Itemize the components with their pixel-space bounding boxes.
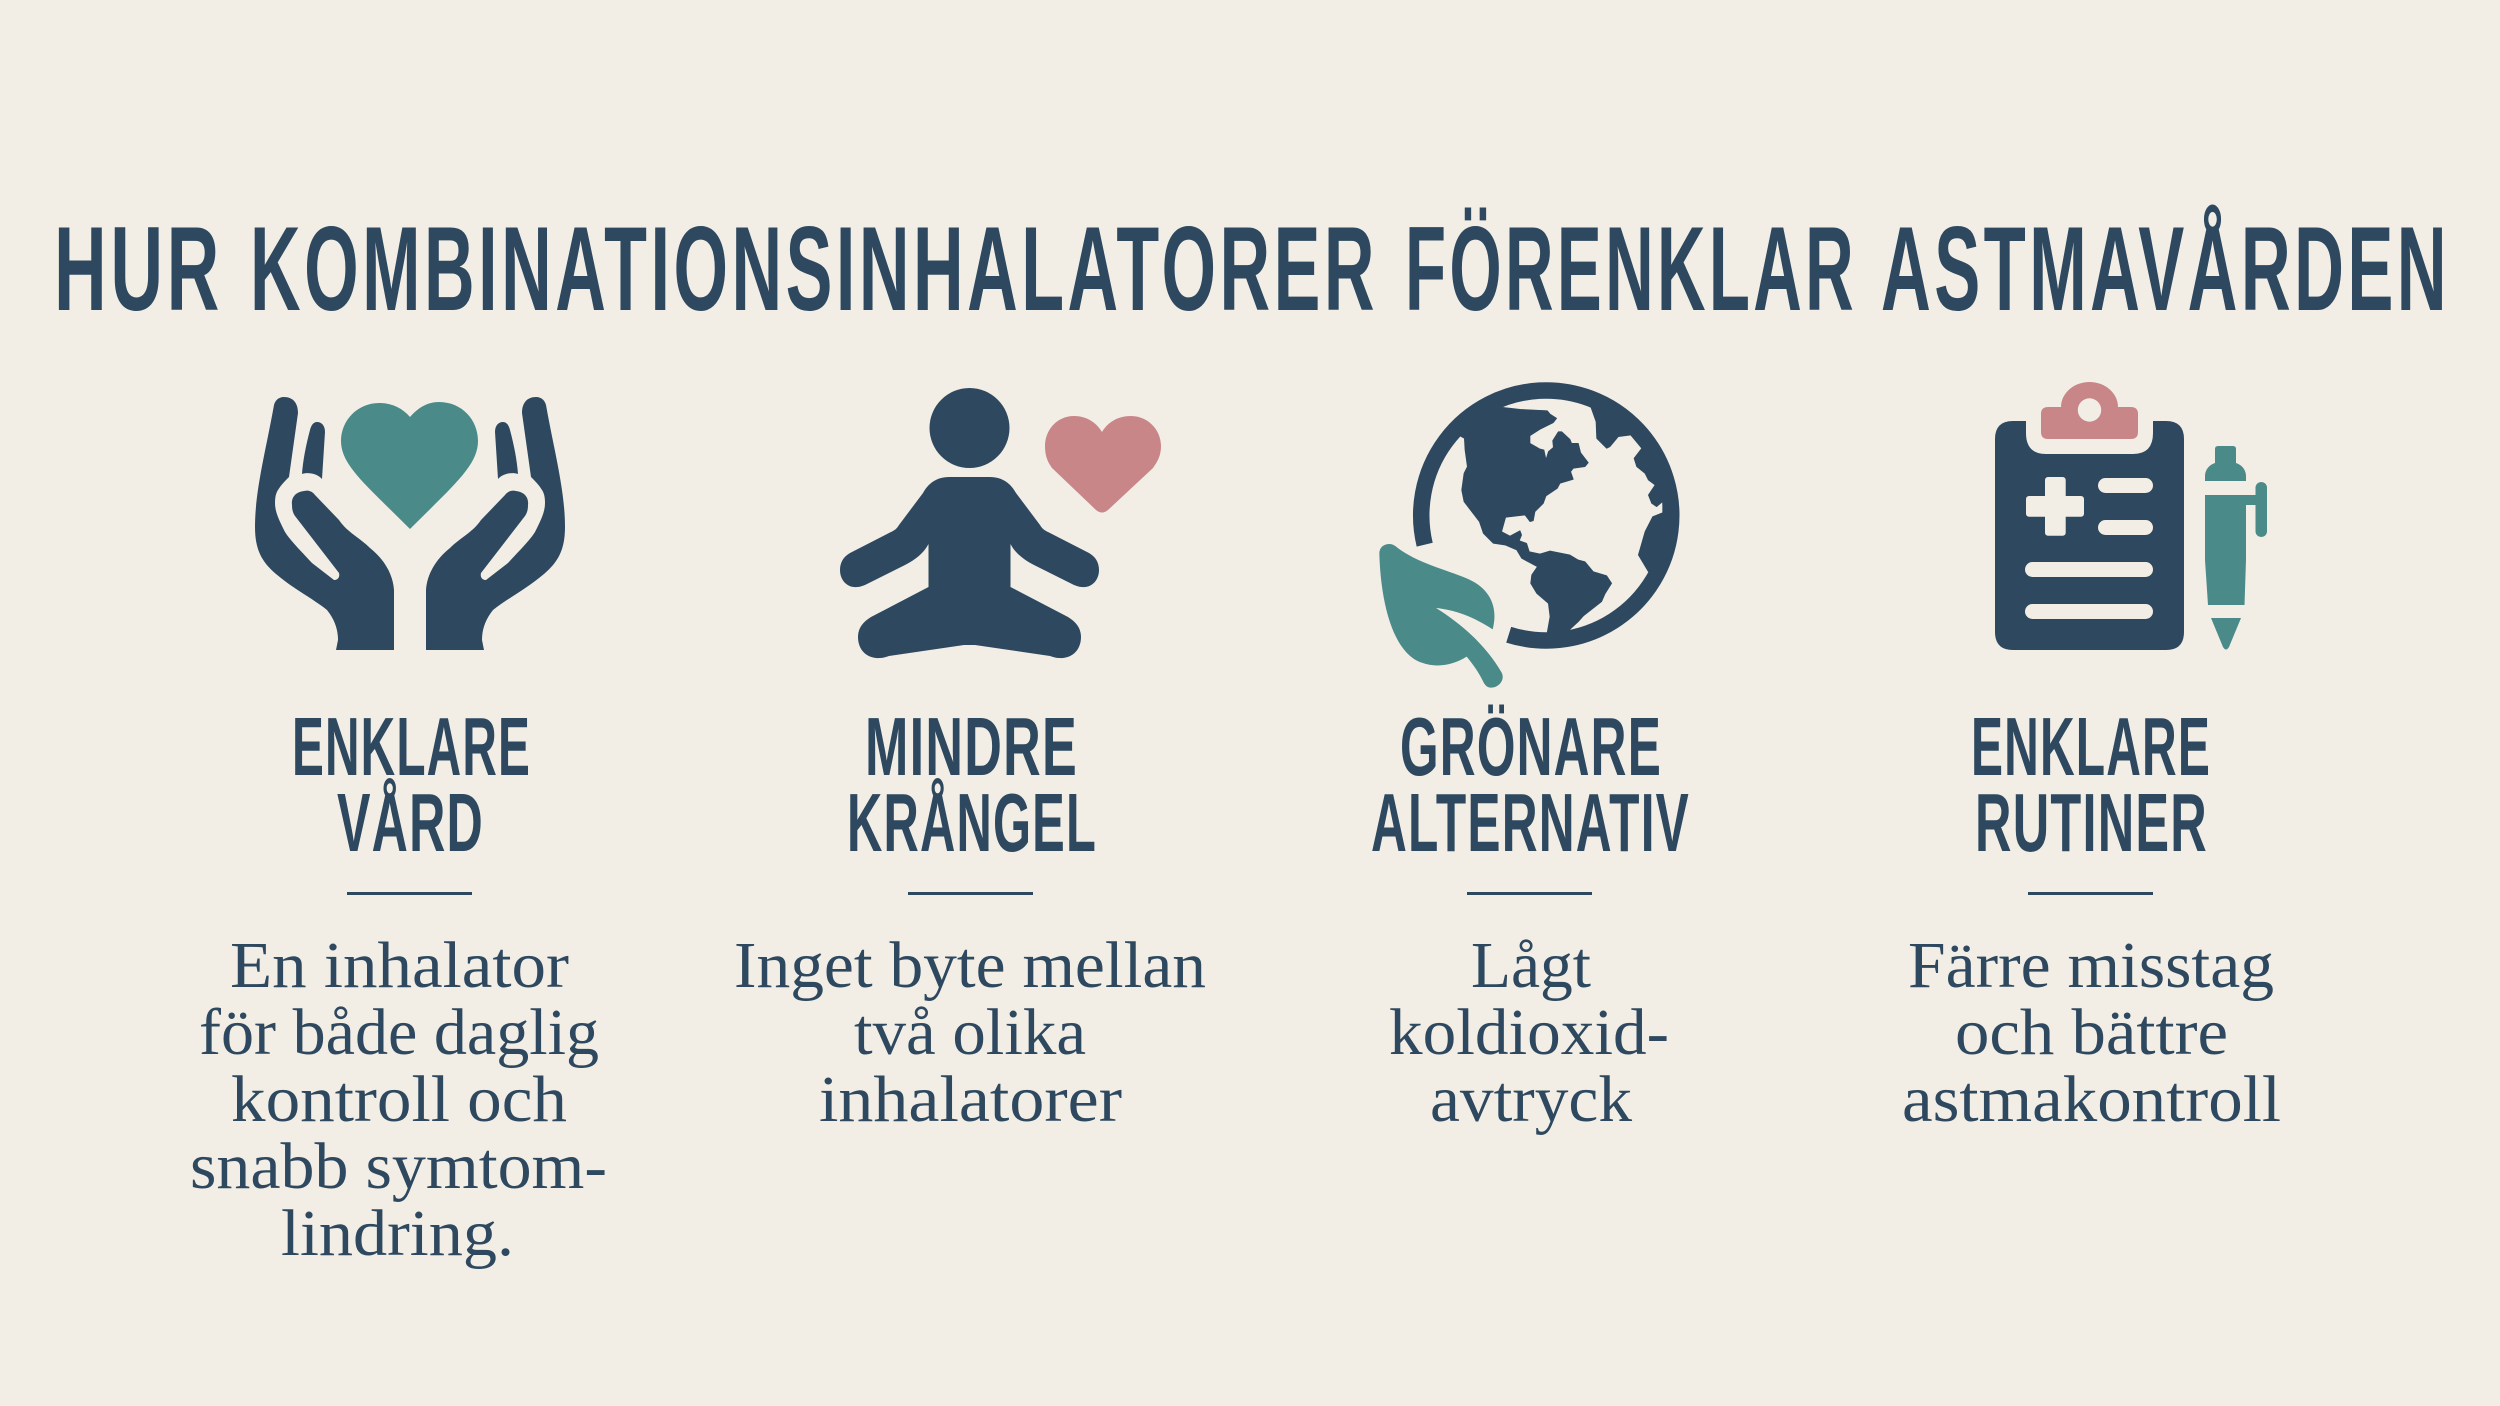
pink heart: [1045, 416, 1161, 512]
description: och bättre: [1955, 996, 2228, 1069]
description: En inhalator: [230, 929, 569, 1002]
description: [1902, 929, 2281, 1136]
description: koldioxid-: [1389, 996, 1669, 1069]
description: Inget byte mellan: [734, 929, 1206, 1002]
panel: enklare vård: [190, 397, 607, 1270]
right hand: [426, 397, 565, 650]
description: två olika: [854, 996, 1086, 1069]
description: lindring.: [281, 1197, 514, 1270]
title: FÖRENKLAR: [1405, 202, 1857, 336]
heading: KRÅNGEL: [847, 776, 1097, 869]
head: [930, 388, 1010, 468]
icon: hands holding heart: [255, 397, 565, 650]
panel: grönare alternativ: [1371, 390, 1690, 1136]
heading: ENKLARE: [1971, 700, 2211, 793]
heading: ALTERNATIV: [1371, 776, 1690, 869]
description: [734, 929, 1206, 1136]
description: snabb symtom-: [190, 1130, 607, 1203]
heading: RUTINER: [1975, 776, 2208, 869]
clip: [2041, 382, 2138, 439]
description: [1389, 929, 1669, 1136]
icon: meditating person with heart: [840, 388, 1161, 658]
description: [190, 929, 607, 1270]
icon: globe with leaf: [1379, 390, 1671, 688]
heading: [292, 700, 531, 869]
globe ring: [1421, 390, 1671, 640]
body: [840, 477, 1099, 658]
heading: [847, 700, 1097, 869]
heart: [341, 402, 478, 529]
continents: [1460, 407, 1670, 637]
heading: GRÖNARE: [1400, 700, 1662, 793]
heading: ENKLARE: [292, 700, 531, 793]
clipboard: [1995, 421, 2184, 650]
heading: [1371, 700, 1690, 869]
description: inhalatorer: [819, 1063, 1122, 1136]
panel: enklare rutiner: [1902, 382, 2281, 1136]
clipboard lines: [2025, 477, 2153, 619]
title: HUR: [54, 202, 223, 336]
heading: MINDRE: [865, 700, 1078, 793]
leaf: [1379, 544, 1503, 688]
heading: VÅRD: [337, 776, 484, 869]
description: Färre misstag: [1908, 929, 2274, 1002]
description: astmakontroll: [1902, 1063, 2281, 1136]
icon: clipboard and pen: [1995, 382, 2267, 650]
title: KOMBINATIONSINHALATORER: [250, 202, 1378, 336]
description: Lågt: [1471, 929, 1591, 1002]
pen: [2205, 446, 2267, 650]
panel: mindre krångel: [734, 388, 1206, 1136]
description: avtryck: [1430, 1063, 1632, 1136]
heading: [1971, 700, 2211, 869]
description: för både daglig: [199, 996, 599, 1069]
description: kontroll och: [231, 1063, 567, 1136]
left hand: [255, 397, 394, 650]
